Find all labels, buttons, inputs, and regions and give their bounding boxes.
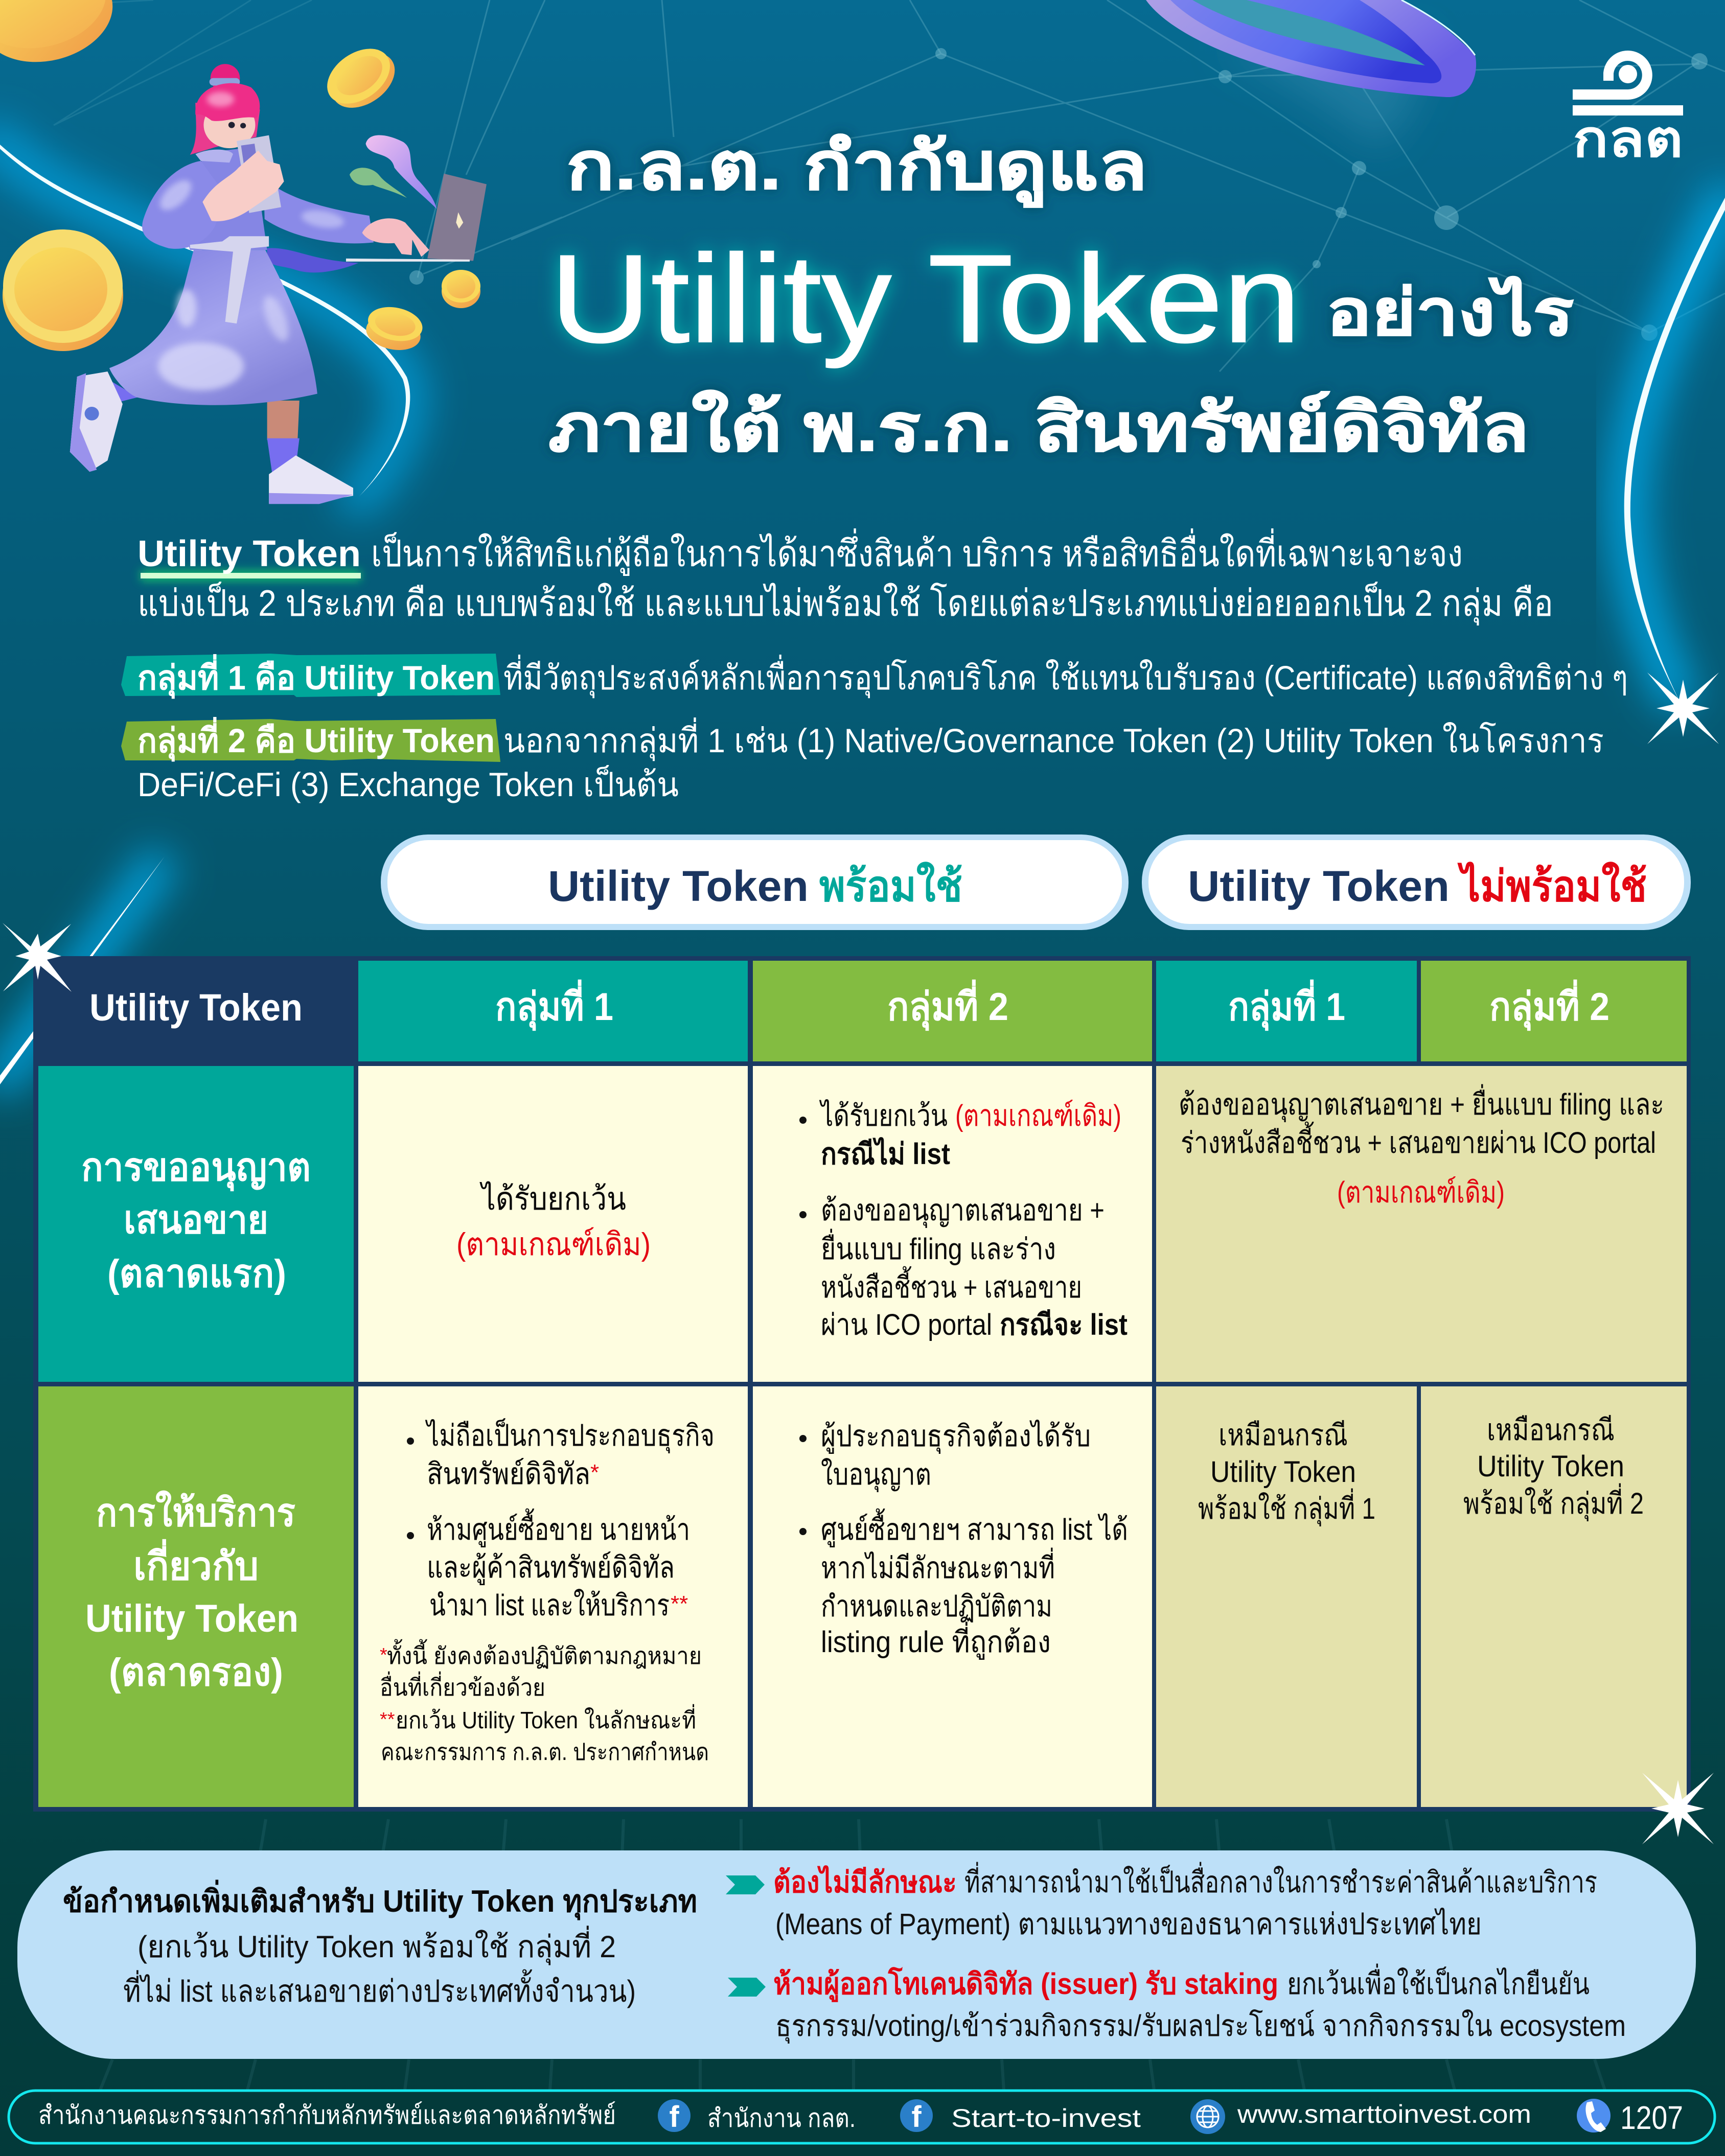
row head: primary market: การขออนุญาต (81, 1146, 311, 1192)
title line 2: Utility Token: Utility Token (550, 228, 1301, 368)
row 2 group 2 cell: ผู้ประกอบธุรกิจต้องได้รับ (821, 1419, 1091, 1454)
group 2 definition (121, 716, 1604, 803)
row 1 group 1 cell (358, 1066, 748, 1382)
left glow curve (0, 140, 410, 497)
row 2 not-ready group 1 cell (1156, 1386, 1417, 1807)
title suffix: อย่างไร (1326, 276, 1574, 349)
title line 1: ก.ล.ต. กำกับดูแล (566, 129, 1147, 208)
icon: facebook 1: f (669, 2100, 679, 2134)
row 2 group 1 cell: และผู้ค้าสินทรัพย์ดิจิทัล (427, 1551, 675, 1585)
header row: กลุ่มที่ 1 (495, 979, 613, 1031)
icon: facebook 2 (900, 2099, 933, 2134)
pill: Utility Token not ready (1142, 834, 1691, 930)
row head: secondary market (38, 1386, 354, 1807)
footer organisation name: สำนักงานคณะกรรมการกำกับหลักทรัพย์และตลาดหลักทรัพย์ (38, 2101, 616, 2129)
coin large left (3, 229, 123, 351)
row head: primary market: เสนอขาย (124, 1198, 268, 1242)
header row: กลุ่มที่ 1 (1228, 979, 1345, 1031)
requirement 1: ต้องไม่มีลักษณะ (773, 1865, 957, 1899)
requirements exception: ที่ไม่ list และเสนอขายต่างประเทศทั้งจำนวน) (123, 1969, 636, 2008)
group 1 definition: กลุ่มที่ 1 คือ Utility Token (137, 654, 495, 699)
pill: Utility Token ready: Utility Token (548, 862, 809, 910)
row 2 group 1 cell: ** (671, 1591, 688, 1616)
footer facebook label 2: Start-to-invest (951, 2104, 1141, 2132)
pill: Utility Token not ready: ไม่พร้อมใช้ (1457, 862, 1647, 910)
arrow icon 2 (728, 1978, 766, 1997)
group 1 definition (121, 654, 1628, 699)
row 2 group 1 cell: อื่นที่เกี่ยวข้องด้วย (380, 1671, 545, 1701)
icon: phone (1577, 2099, 1611, 2132)
sparkle left of table (3, 923, 72, 992)
row 2 group 1 cell: นำมา list และให้บริการ (429, 1588, 670, 1622)
table (33, 956, 1691, 1812)
row 2 not-ready group 1 cell: เหมือนกรณี (1218, 1419, 1348, 1452)
row 2 not-ready group 1 cell: Utility Token (1210, 1455, 1356, 1489)
group 2 definition: นอกจากกลุ่มที่ 1 เช่น (1) Native/Governance Token (2) Utility Token ในโครงการ (503, 717, 1604, 761)
row 2 group 1 cell: สินทรัพย์ดิจิทัล (427, 1457, 590, 1491)
coin middle (363, 303, 426, 355)
row 1 not-ready merged cell (1156, 1066, 1687, 1382)
ring decoration (1146, 0, 1476, 148)
arrow icon 1 (726, 1875, 765, 1894)
requirements heading: ข้อกำหนดเพิ่มเติมสำหรับ Utility Token ทุกประเภท (63, 1880, 697, 1920)
row 1 group 1 cell: ได้รับยกเว้น (479, 1181, 626, 1217)
coin top-left (0, 0, 123, 76)
row 2 group 2 cell: ศูนย์ซื้อขายฯ สามารถ list ได้ (821, 1509, 1128, 1547)
requirements exception: (ยกเว้น Utility Token พร้อมใช้ กลุ่มที่ 2 (137, 1926, 616, 1965)
requirement 2 (773, 1963, 1626, 2044)
sparkle top right (1647, 673, 1719, 744)
row 2 group 1 cell: คณะกรรมการ ก.ล.ต. ประกาศกำหนด (381, 1738, 709, 1765)
requirements exception (123, 1926, 636, 2008)
group 2 definition: กลุ่มที่ 2 คือ Utility Token (137, 716, 495, 762)
pill: Utility Token ready: พร้อมใช้ (819, 862, 962, 910)
background network lines (54, 0, 1725, 372)
row 1 group 2 cell: ได้รับยกเว้น (819, 1099, 948, 1132)
footer hotline: 1207 (1620, 2099, 1683, 2136)
pill: Utility Token ready (381, 834, 1129, 930)
row 2 not-ready group 2 cell: เหมือนกรณี (1487, 1413, 1615, 1447)
requirement 2: ยกเว้นเพื่อใช้เป็นกลไกยืนยัน (1287, 1963, 1590, 2001)
intro paragraph: เป็นการให้สิทธิแก่ผู้ถือในการได้มาซึ่งสินค้า บริการ หรือสิทธิอื่นใดที่เฉพาะเจาะจง (371, 528, 1463, 576)
row 2 group 1 cell (358, 1386, 748, 1807)
group 2 definition: DeFi/CeFi (3) Exchange Token เป็นต้น (137, 764, 679, 803)
row 2 not-ready group 2 cell: พร้อมใช้ กลุ่มที่ 2 (1463, 1483, 1644, 1522)
icon: globe (1190, 2099, 1225, 2134)
requirement 2: ธุรกรรม/voting/เข้าร่วมกิจกรรม/รับผลประโยชน์ จากกิจกรรมใน ecosystem (775, 2009, 1626, 2044)
row 1 group 2 cell: หนังสือชี้ชวน + เสนอขาย (821, 1266, 1082, 1304)
row 1 group 2 cell: (ตามเกณฑ์เดิม) (955, 1099, 1121, 1132)
row 2 group 2 cell: กำหนดและปฏิบัติตาม (821, 1590, 1052, 1623)
illustration: girl with phone and laptop (70, 64, 487, 504)
row 2 group 1 cell: * (590, 1460, 599, 1485)
icon: facebook 2: f (911, 2100, 922, 2134)
row 1 group 2 cell: ยื่นแบบ filing และร่าง (821, 1228, 1056, 1266)
row 2 group 2 cell: หากไม่มีลักษณะตามที่ (821, 1547, 1055, 1585)
table frame (33, 956, 1691, 1812)
title line 3: ภายใต้ พ.ร.ก. สินทรัพย์ดิจิทัล (548, 390, 1529, 465)
row 1 group 2 cell: ผ่าน ICO portal (821, 1308, 992, 1341)
row 2 group 1 cell: ยกเว้น Utility Token ในลักษณะที่ (396, 1704, 696, 1733)
row head: secondary market: (ตลาดรอง) (109, 1651, 283, 1694)
row 2 not-ready group 2 cell (1421, 1386, 1687, 1807)
pill: Utility Token not ready: Utility Token (1188, 862, 1450, 910)
row 2 group 2 cell: ใบอนุญาต (821, 1457, 931, 1493)
row 2 group 1 cell: * (380, 1644, 387, 1666)
header row (89, 961, 1687, 1061)
row 2 not-ready group 2 cell: Utility Token (1477, 1450, 1624, 1483)
background network nodes (409, 45, 1708, 341)
intro paragraph: แบ่งเป็น 2 ประเภท คือ แบบพร้อมใช้ และแบบไม่พร้อมใช้ โดยแต่ละประเภทแบ่งย่อยออกเป็น 2 กลุ่ม คือ (137, 582, 1553, 625)
header row: Utility Token (89, 986, 303, 1029)
row 2 group 1 cell: ทั้งนี้ ยังคงต้องปฏิบัติตามกฎหมาย (387, 1639, 702, 1669)
logo: SEC Thailand: กลต (1573, 110, 1683, 168)
row 1 group 1 cell: (ตามเกณฑ์เดิม) (456, 1227, 651, 1262)
intro paragraph: Utility Token (137, 534, 361, 574)
right glow curve (1624, 187, 1725, 705)
row head: secondary market: การให้บริการ (96, 1490, 295, 1535)
additional requirements box (17, 1850, 1696, 2059)
logo: SEC Thailand (1573, 56, 1683, 168)
row 1 group 2 cell: ต้องขออนุญาตเสนอขาย + (821, 1194, 1105, 1228)
icon: facebook 1 (658, 2099, 691, 2134)
faint bottom rays (82, 1819, 1620, 2136)
intro paragraph (137, 528, 1553, 625)
requirement 1 (773, 1862, 1597, 1941)
lower-left glow streak (0, 856, 165, 1092)
sparkle bottom right (1642, 1773, 1714, 1844)
row 2 group 2 cell (753, 1386, 1152, 1807)
row 1 group 2 cell: กรณีจะ list (1000, 1308, 1128, 1341)
row 2 group 1 cell: ** (380, 1709, 395, 1730)
header row: กลุ่มที่ 2 (887, 979, 1008, 1031)
row 2 not-ready group 1 cell: พร้อมใช้ กลุ่มที่ 1 (1198, 1488, 1375, 1527)
row 2 group 1 cell: ห้ามศูนย์ซื้อขาย นายหน้า (427, 1509, 690, 1547)
header row: กลุ่มที่ 2 (1489, 979, 1609, 1031)
requirement 2: ห้ามผู้ออกโทเคนดิจิทัล (issuer) รับ staking (773, 1966, 1278, 2002)
row 1 group 2 cell (753, 1066, 1152, 1382)
row head: secondary market: Utility Token (85, 1597, 298, 1640)
row 1 group 2 cell: กรณีไม่ list (821, 1137, 950, 1171)
footer website: www.smarttoinvest.com (1237, 2100, 1531, 2128)
requirement 1: (Means of Payment) ตามแนวทางของธนาคารแห่งประเทศไทย (775, 1907, 1482, 1941)
row 2 group 2 cell: listing rule ที่ถูกต้อง (821, 1621, 1051, 1660)
coin small top (317, 36, 405, 120)
row head: primary market: (ตลาดแรก) (107, 1252, 286, 1295)
coin small right (442, 270, 480, 308)
row head: secondary market: เกี่ยวกับ (133, 1539, 259, 1588)
row 2 group 1 cell: ไม่ถือเป็นการประกอบธุรกิจ (425, 1418, 715, 1454)
footer bar (9, 2091, 1715, 2143)
footer facebook label 1: สำนักงาน กลต. (707, 2104, 856, 2132)
row head: primary market (38, 1066, 354, 1382)
row 1 not-ready merged cell: (ตามเกณฑ์เดิม) (1337, 1176, 1505, 1209)
